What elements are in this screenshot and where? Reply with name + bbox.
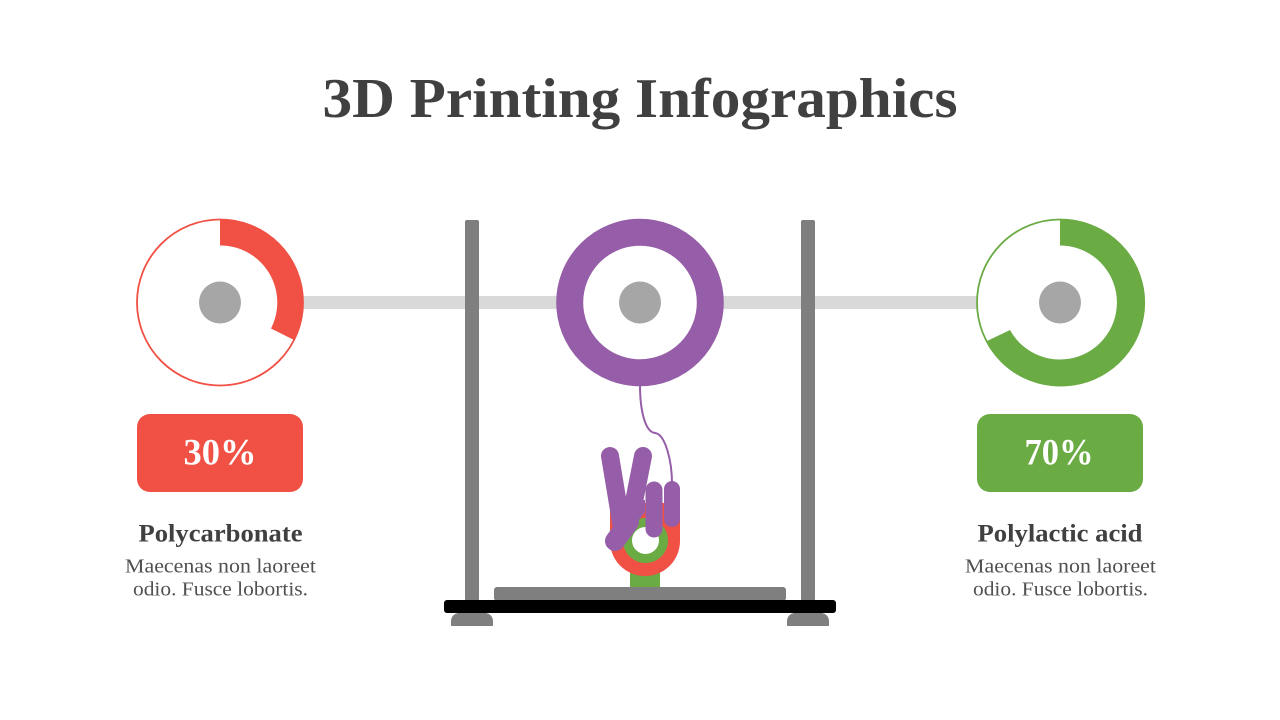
purple arm right	[632, 456, 643, 512]
green filament spool: 70%	[977, 219, 1145, 386]
badge: 70%: 70%	[1024, 432, 1094, 474]
text block: polycarbonate: Maecenas non laoreet	[125, 556, 316, 578]
text block: polycarbonate: odio. Fusce lobortis.	[133, 578, 308, 600]
text block: polylactic acid	[965, 520, 1156, 600]
nozzle base	[630, 565, 660, 587]
green ring	[628, 522, 664, 558]
base bar	[444, 600, 836, 613]
left foot	[451, 613, 493, 626]
purple roller two	[664, 489, 680, 519]
purple arm diagonal	[615, 522, 629, 541]
print head	[610, 456, 680, 587]
purple roller one	[646, 490, 662, 529]
badge: 30%	[137, 414, 303, 492]
filament wire	[640, 385, 672, 484]
title: 3D Printing Infographics	[322, 68, 958, 130]
left column	[465, 220, 479, 601]
red filament spool: 30%	[137, 219, 303, 386]
badge: 70%	[977, 414, 1143, 492]
printer frame	[444, 220, 836, 626]
badge: 30%: 30%	[184, 432, 256, 474]
purple arm left	[610, 456, 622, 528]
text block: polylactic acid: odio. Fusce lobortis.	[973, 578, 1148, 600]
purple arm joint	[615, 500, 645, 524]
right column	[801, 220, 815, 601]
purple filament spool	[570, 232, 710, 373]
build plate	[494, 587, 786, 601]
right foot	[787, 613, 829, 626]
connecting spindle bar	[300, 296, 980, 309]
text block: polylactic acid: Maecenas non laoreet	[965, 556, 1156, 578]
text block: polycarbonate	[125, 520, 316, 600]
red extruder body	[610, 503, 680, 576]
text block: polylactic acid: Polylactic acid	[978, 520, 1143, 548]
text block: polycarbonate: Polycarbonate	[138, 520, 302, 548]
